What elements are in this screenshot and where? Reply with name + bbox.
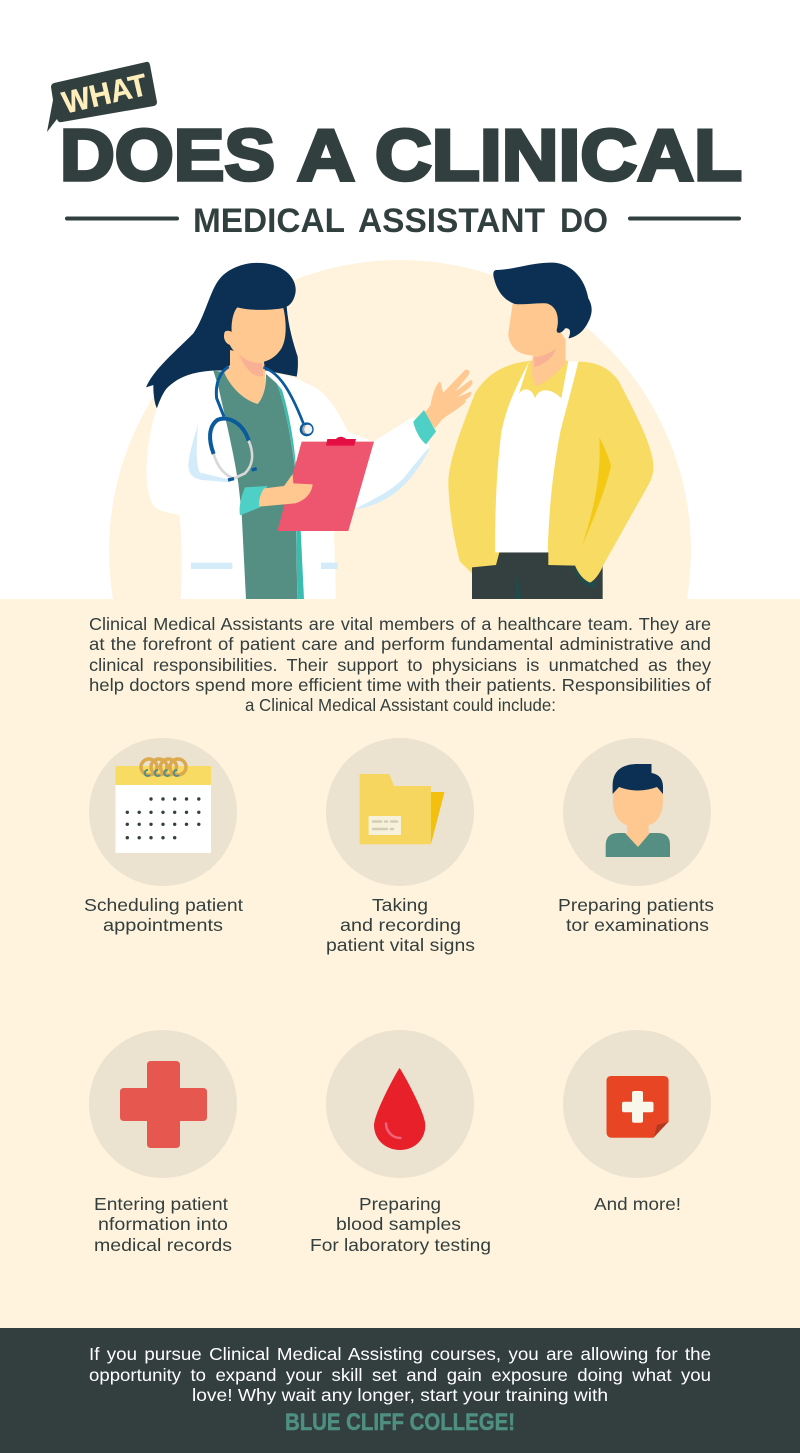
item: vital signs <box>326 738 475 955</box>
coat pockets <box>191 563 338 569</box>
caption: Taking <box>372 895 428 915</box>
patient collar <box>519 361 568 398</box>
item: and more <box>563 1030 711 1214</box>
scrubs trim <box>277 383 304 599</box>
doctor face <box>224 307 286 363</box>
caption: For laboratory testing <box>310 1235 491 1255</box>
clipboard <box>277 442 374 531</box>
intro text: clinical responsibilities. Their support to physicians is unmatched as they <box>89 655 711 675</box>
caption <box>94 1194 232 1255</box>
badge: what: WHAT <box>59 67 151 120</box>
footer text: If you pursue Clinical Medical Assisting courses, you are allowing for the <box>89 1344 711 1364</box>
doctor neck <box>223 350 265 404</box>
intro text: Clinical Medical Assistants are vital members of a healthcare team. They are <box>89 614 711 634</box>
intro text: at the forefront of patient care and perform fundamental administrative and <box>89 634 711 654</box>
caption: medical records <box>94 1235 232 1255</box>
item: medical records <box>89 1030 237 1255</box>
footer text: opportunity to expand your skill set and gain exposure doing what you <box>89 1365 711 1385</box>
footer text <box>89 1344 711 1405</box>
caption: patient vital signs <box>326 935 475 955</box>
item: preparing patients <box>558 738 714 935</box>
footer panel <box>0 1328 800 1453</box>
caption: appointments <box>103 915 223 935</box>
caption: Preparing patients <box>558 895 714 915</box>
caption: And more! <box>594 1194 681 1214</box>
subheading: ASSISTANT <box>358 202 545 240</box>
caption <box>326 895 475 955</box>
badge: what <box>47 62 157 132</box>
patient hair <box>493 263 592 338</box>
icon: blood drop <box>374 1068 425 1150</box>
patient shirt <box>495 361 578 552</box>
college name: BLUE CLIFF COLLEGE! <box>285 1409 515 1436</box>
cardigan fold <box>582 437 611 547</box>
doctor raised hand <box>424 370 473 428</box>
stethoscope <box>210 367 314 480</box>
caption: and recording <box>340 915 461 935</box>
heading: does a clinical: CLINICAL <box>375 116 742 196</box>
doctor coat <box>147 370 352 599</box>
heading: does a clinical <box>60 116 742 196</box>
coat sleeve shadow <box>188 423 231 482</box>
intro text: a Clinical Medical Assistant could include: <box>245 695 556 715</box>
caption: Entering patient <box>94 1194 228 1214</box>
subheading: DO <box>560 202 608 240</box>
doctor cuff <box>413 410 436 444</box>
heading: does a clinical: A <box>297 116 355 196</box>
illustration backdrop circle <box>109 260 691 599</box>
subheading <box>193 202 608 240</box>
patient face <box>508 300 566 356</box>
intro text <box>89 614 711 715</box>
illustration: doctor <box>146 263 430 599</box>
title <box>47 62 742 240</box>
caption <box>558 895 714 935</box>
caption <box>310 1194 491 1255</box>
icon: patient <box>606 764 670 857</box>
caption <box>84 895 243 935</box>
footer text: love! Why wait any longer, start your training with <box>192 1385 608 1405</box>
caption: tor examinations <box>566 915 709 935</box>
doctor hair <box>146 263 298 410</box>
icon: folder <box>360 774 444 844</box>
heading: does a clinical: DOES <box>60 116 275 196</box>
intro text: help doctors spend more efficient time with their patients. Responsibilities of <box>89 675 711 695</box>
patient neck <box>532 340 566 387</box>
patient cardigan <box>448 361 653 583</box>
patient trousers <box>472 552 603 599</box>
caption: blood samples <box>336 1214 461 1234</box>
caption: nformation into <box>98 1214 228 1234</box>
caption: Scheduling patient <box>84 895 243 915</box>
doctor arm <box>343 417 430 508</box>
clipboard clip <box>326 437 356 446</box>
doctor scrubs <box>213 371 297 599</box>
icon: calendar <box>116 759 211 853</box>
panel: responsibilities <box>0 599 800 1328</box>
illustration: patient <box>413 263 653 599</box>
icon: medical note <box>606 1076 669 1138</box>
pocket shadow <box>573 566 597 587</box>
doctor hand and cuff <box>240 486 267 515</box>
item: blood samples <box>310 1030 491 1255</box>
caption: Preparing <box>359 1194 441 1214</box>
subheading: MEDICAL <box>193 202 345 240</box>
item: scheduling <box>84 738 243 935</box>
icon: cross <box>120 1061 207 1148</box>
